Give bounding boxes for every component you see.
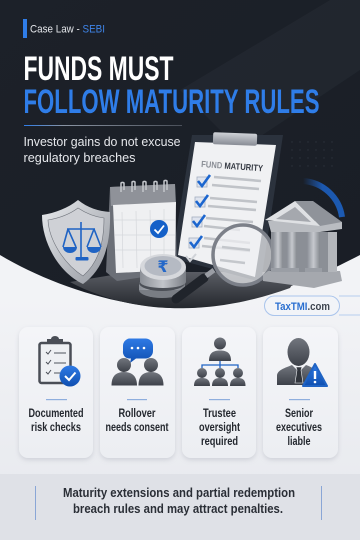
panel: documented risk checks <box>19 327 93 458</box>
title <box>24 50 320 121</box>
background: dark header with curved lower edge <box>0 0 360 308</box>
dot pattern <box>291 141 333 167</box>
label <box>199 406 240 448</box>
label: required <box>201 434 238 448</box>
icon: bank building <box>263 181 342 288</box>
label <box>28 406 84 434</box>
subtitle: Investor gains do not excuse <box>24 134 180 149</box>
label: Senior <box>285 406 313 420</box>
label: risk checks <box>31 420 81 434</box>
panel: bottom takeaway band <box>0 474 360 540</box>
panel: rollover needs consent <box>100 327 175 458</box>
title: FUNDS MUST <box>24 50 174 88</box>
icon: calendar <box>106 180 177 281</box>
ground shadow <box>70 272 300 308</box>
label: Documented <box>28 406 84 420</box>
label: Rollover <box>118 406 156 420</box>
icon: clipboard <box>172 132 283 282</box>
takeaway text <box>63 486 295 516</box>
label: executives <box>276 420 322 434</box>
subtitle: regulatory breaches <box>24 150 136 165</box>
subtitle <box>24 134 180 165</box>
label: Trustee <box>203 406 236 420</box>
label: needs consent <box>106 420 168 434</box>
logo: TaxTMI.com pill <box>264 296 360 316</box>
eyebrow: case law label <box>23 19 105 38</box>
icon: checklist clipboard <box>40 336 80 386</box>
label <box>276 406 322 448</box>
panel: senior executives liable <box>263 327 338 458</box>
icon: rupee coins <box>139 254 186 298</box>
label <box>106 406 168 434</box>
icon: two people with speech bubble <box>112 338 164 386</box>
icon: clipboard: FUND MATURITY <box>201 159 263 173</box>
icon: magnifying glass <box>176 225 273 299</box>
takeaway text: breach rules and may attract penalties. <box>73 502 283 516</box>
panel: trustee oversight required <box>182 327 256 458</box>
label: liable <box>288 434 311 448</box>
eyebrow: case law label: Case Law - SEBI <box>30 24 105 36</box>
icon: executive with warning triangle <box>277 338 327 386</box>
icon: shield with scales <box>42 200 110 284</box>
label: oversight <box>199 420 240 434</box>
takeaway text: Maturity extensions and partial redemption <box>63 486 295 500</box>
icon: org chart <box>194 338 246 386</box>
icon: rupee coins: ₹ <box>157 257 169 276</box>
hero illustration <box>42 132 342 308</box>
logo: TaxTMI.com pill: TaxTMI.com <box>275 301 330 313</box>
